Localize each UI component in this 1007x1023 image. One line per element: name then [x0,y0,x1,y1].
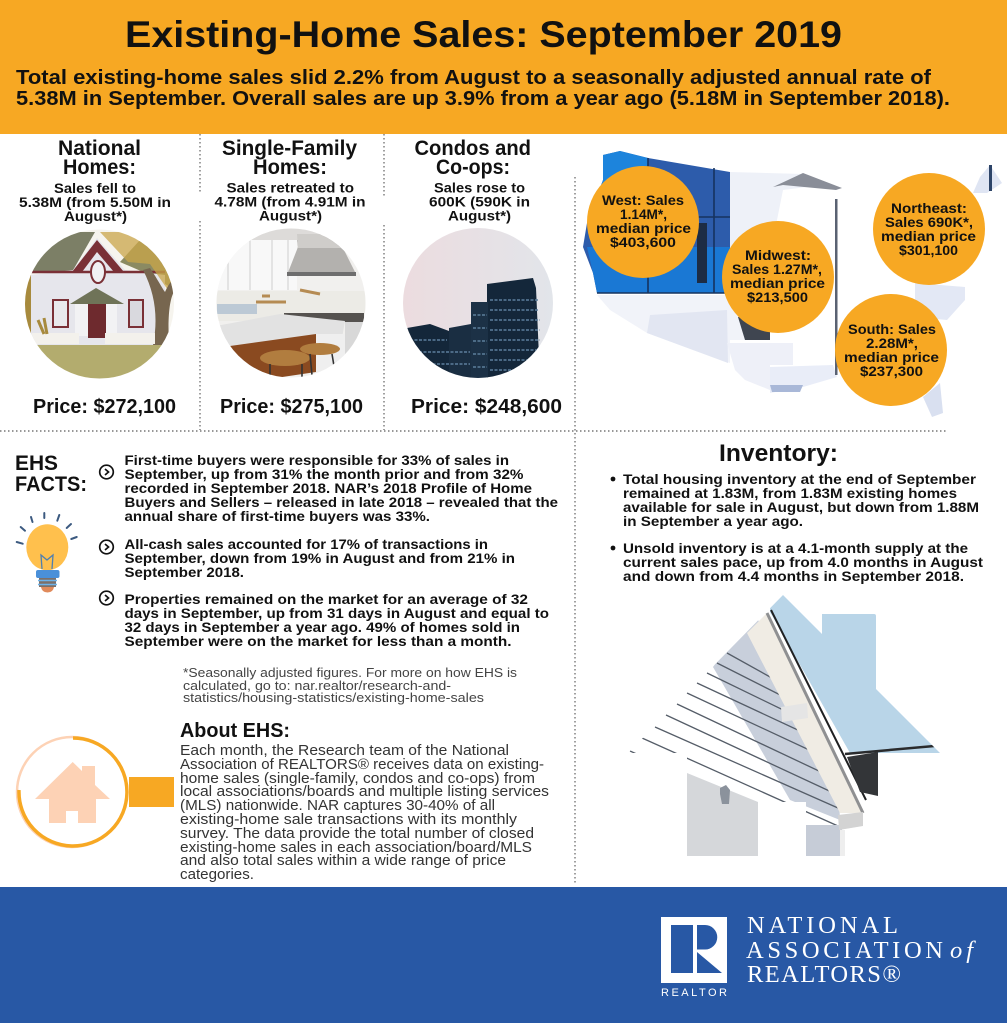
inventory bullet: total inventory: Total housing inventory at the end of September [623,471,977,487]
about EHS text: (MLS) nationwide. NAR captures 30-40% of all [180,798,495,814]
condos sales text: Sales rose to [434,180,525,196]
condos sales text: August*) [448,208,511,224]
panel: single-family homes [214,137,367,418]
callout: northeast: Sales 690K*, [885,214,973,230]
condos sales text [429,180,530,224]
US map silhouette [583,151,1002,417]
panel: EHS facts [15,451,558,649]
about EHS text: local associations/boards and multiple listing services [180,784,549,800]
fact: all-cash sales: September, down from 19% in August and from 21% in [124,550,515,566]
photo: house silhouette [625,590,945,860]
summary text: Total existing-home sales slid 2.2% from August to a seasonally adjusted annual rate of [16,66,931,89]
footnote: calculated, go to: nar.realtor/research-and- [183,678,451,693]
fact: first-time buyers: annual share of first-time buyers was 33%. [124,508,430,524]
callout: midwest: $213,500 [747,289,808,305]
panel: condos and co-ops [402,137,562,418]
national sales text: 5.38M (from 5.50M in [19,194,171,210]
fact: days on market: Properties remained on the market for an average of 32 [124,591,528,607]
fact: first-time buyers [100,452,558,524]
fact: first-time buyers: recorded in September 2018. NAR’s 2018 Profile of Home [124,480,532,496]
callout: west: West: Sales [602,192,684,208]
heading: national homes: Homes: [63,156,136,179]
heading: EHS facts: EHS [15,451,58,475]
heading: single-family homes: Homes: [253,156,327,179]
photo: house [22,229,175,380]
inventory bullet: total inventory [611,471,979,529]
inventory bullet: unsold inventory: current sales pace, up from 4.0 months in August [623,554,983,570]
callout: midwest: Sales 1.27M*, [732,261,822,277]
callout: south: median price [844,349,939,365]
icon: house in ring [17,737,174,847]
fact: days on market: 32 days in September a year ago. 49% of homes sold in [124,619,520,635]
heading: condos and co-ops [414,137,531,179]
heading: condos and co-ops: Co-ops: [436,156,510,179]
logo: association wordmark: ASSOCIATION [746,937,943,964]
about EHS text: existing-home sales in each association/board/MLS [180,840,532,856]
fact: first-time buyers: First-time buyers were responsible for 33% of sales in [124,452,509,468]
about EHS text: survey. The data provide the total number of closed [180,826,534,842]
heading: EHS facts [15,451,87,496]
panel: inventory [611,440,983,860]
summary text [16,66,950,110]
footnote: statistics/housing-statistics/existing-home-sales [183,690,485,705]
photo: condo towers [402,227,554,380]
inventory bullet: unsold inventory: and down from 4.4 months in September 2018. [623,568,964,584]
national sales text: Sales fell to [54,180,136,196]
callout: south: South: Sales [848,321,936,337]
callout: west: $403,600 [610,234,676,250]
title: Existing-Home Sales: September 2019 [125,14,842,55]
single-family sales text: August*) [259,208,322,224]
panel: about EHS [180,719,549,883]
callout: northeast: median price [881,228,976,244]
callout: midwest: Midwest: [745,247,811,263]
photo: kitchen [216,228,367,380]
inventory bullet: unsold inventory [611,540,983,584]
heading: about EHS: About EHS: [180,719,290,742]
logo: association wordmark: REALTORS® [747,961,901,988]
fact: first-time buyers: Buyers and Sellers – released in late 2018 – revealed that the [124,494,558,510]
about EHS text: categories. [180,867,254,883]
panel: regional map [583,151,1002,417]
inventory bullet: total inventory: remained at 1.83M, from 1.83M existing homes [623,485,957,501]
about EHS text: existing-home sale transactions with its monthly [180,812,518,828]
condos sales text: 600K (590K in [429,194,530,210]
logo: association wordmark [746,912,976,988]
heading: single-family homes [222,137,357,179]
about EHS text: Each month, the Research team of the National [180,743,509,759]
heading: single-family homes: Single-Family [222,137,357,160]
footer band [0,887,1007,1023]
footnote [183,665,518,705]
about EHS text [180,743,549,883]
callout: northeast [873,173,985,285]
logo: REALTOR block R [661,917,727,999]
callout: south: $237,300 [860,363,923,379]
single-family sales text: 4.78M (from 4.91M in [214,194,366,210]
price: national: Price: $272,100 [33,396,176,418]
fact: days on market: days in September, up from 31 days in August and equal to [124,605,549,621]
heading: condos and co-ops: Condos and [414,137,531,160]
inventory bullet: unsold inventory: Unsold inventory is at a 4.1-month supply at the [623,540,968,556]
heading: EHS facts: FACTS: [15,472,87,496]
about EHS text: Association of REALTORS® receives data on existing- [180,757,544,773]
fact: days on market: September were on the market for less than a month. [124,633,512,649]
callout: west: 1.14M*, [620,206,667,222]
fact: days on market [100,591,549,649]
callout: south [835,294,947,406]
fact: all-cash sales: All-cash sales accounted for 17% of transactions in [124,536,488,552]
logo: association wordmark: of [950,937,976,964]
heading: national homes [58,137,141,179]
single-family sales text: Sales retreated to [226,180,354,196]
callout: northeast: Northeast: [891,200,967,216]
callout: west: median price [596,220,691,236]
inventory bullet: total inventory: in September a year ago. [623,513,803,529]
fact: all-cash sales: September 2018. [124,564,244,580]
footnote: *Seasonally adjusted figures. For more on how EHS is [183,665,518,680]
inventory bullet: total inventory: available for sale in August, but down from 1.88M [623,499,979,515]
fact: all-cash sales [100,536,515,580]
callout: west [587,166,699,278]
about EHS text: home sales (single-family, condos and co-ops) from [180,771,535,787]
summary text: 5.38M in September. Overall sales are up 3.9% from a year ago (5.18M in September 2018). [16,87,950,110]
single-family sales text [214,180,366,224]
fact: first-time buyers: September, up from 31% the month prior and from 32% [124,466,524,482]
price: condos: Price: $248,600 [411,396,562,418]
header band [0,0,1007,134]
panel: national homes [19,137,176,418]
about EHS text: and also total sales within a wide range of price [180,853,506,869]
price: single-family: Price: $275,100 [220,396,363,418]
logo: REALTOR block R: REALTOR [661,987,727,999]
heading: inventory: Inventory: [719,440,838,467]
callout: midwest [722,221,834,333]
icon: light bulb [17,513,77,592]
national sales text: August*) [64,208,127,224]
heading: national homes: National [58,137,141,160]
callout: northeast: $301,100 [899,242,958,258]
national sales text [19,180,171,224]
callout: midwest: median price [730,275,825,291]
callout: south: 2.28M*, [866,335,918,351]
logo: association wordmark: NATIONAL [747,912,898,939]
